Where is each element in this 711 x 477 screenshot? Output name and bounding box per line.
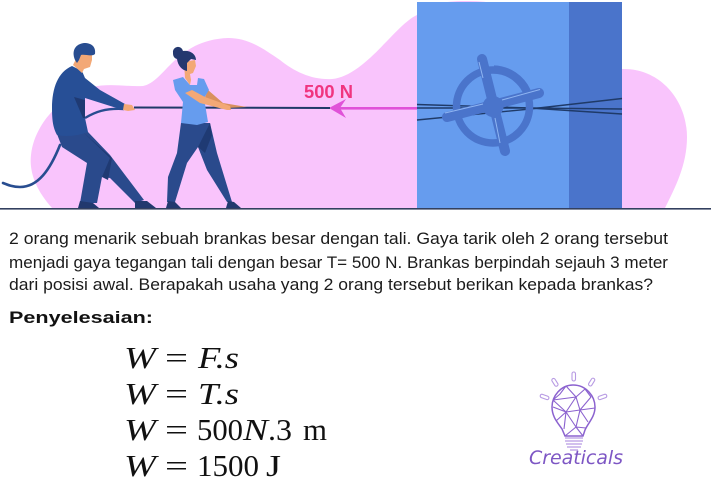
logo: Creaticals [529, 372, 623, 469]
man shoes [78, 201, 99, 208]
woman neck and face [184, 60, 196, 85]
equation 3: 500 [197, 412, 243, 447]
equation 1: F.s [197, 340, 239, 375]
woman far arm [205, 90, 247, 108]
woman legs [167, 123, 232, 202]
equation 1 [124, 340, 239, 375]
woman figure [166, 47, 247, 208]
equation 3: N [242, 412, 271, 447]
equation 3 [124, 412, 327, 447]
equation 2: W [124, 376, 160, 411]
woman shoes [166, 201, 181, 208]
safe wheel [445, 59, 540, 151]
problem statement: 2 orang menarik sebuah brankas besar dengan tali. Gaya tarik oleh 2 orang tersebut [9, 230, 668, 248]
equation 2: = [165, 376, 188, 411]
equations [124, 340, 327, 477]
problem statement: menjadi gaya tegangan tali dengan besar T= 500 N. Brankas berpindah sejauh 3 meter [9, 254, 669, 272]
problem statement: dari posisi awal. Berapakah usaha yang 2 orang tersebut berikan kepada brankas? [9, 276, 653, 294]
rope [3, 108, 330, 187]
man legs [57, 132, 144, 203]
logo wordmark: Creaticals [529, 447, 623, 469]
equation 4 [124, 448, 281, 477]
problem statement [9, 230, 669, 294]
background pink blob [31, 1, 687, 208]
man torso and arm [52, 66, 125, 136]
equation 2 [124, 376, 239, 411]
man hand [123, 104, 135, 111]
icon: bulb rays [540, 372, 607, 400]
woman torso [173, 77, 209, 125]
ropes around safe [417, 98, 622, 120]
equation 3: m [303, 412, 327, 447]
equation 1: W [124, 340, 160, 375]
woman near arm [185, 90, 231, 110]
safe side [569, 2, 622, 208]
equation 3: W [124, 412, 160, 447]
ground line [0, 208, 711, 210]
man neck and face [73, 53, 92, 73]
illustration: safe [417, 2, 622, 208]
force arrow [329, 99, 417, 118]
man figure [52, 43, 156, 208]
icon: light bulb [540, 372, 607, 450]
equation 1: = [165, 340, 188, 375]
equation 2: T.s [198, 376, 239, 411]
woman hair [173, 47, 196, 71]
equation 3: = [165, 412, 188, 447]
equation 3: .3 [268, 412, 292, 447]
force label: 500 N [304, 82, 353, 102]
man hair [74, 43, 95, 63]
safe front [417, 2, 569, 208]
solution heading: Penyelesaian: [9, 308, 153, 327]
